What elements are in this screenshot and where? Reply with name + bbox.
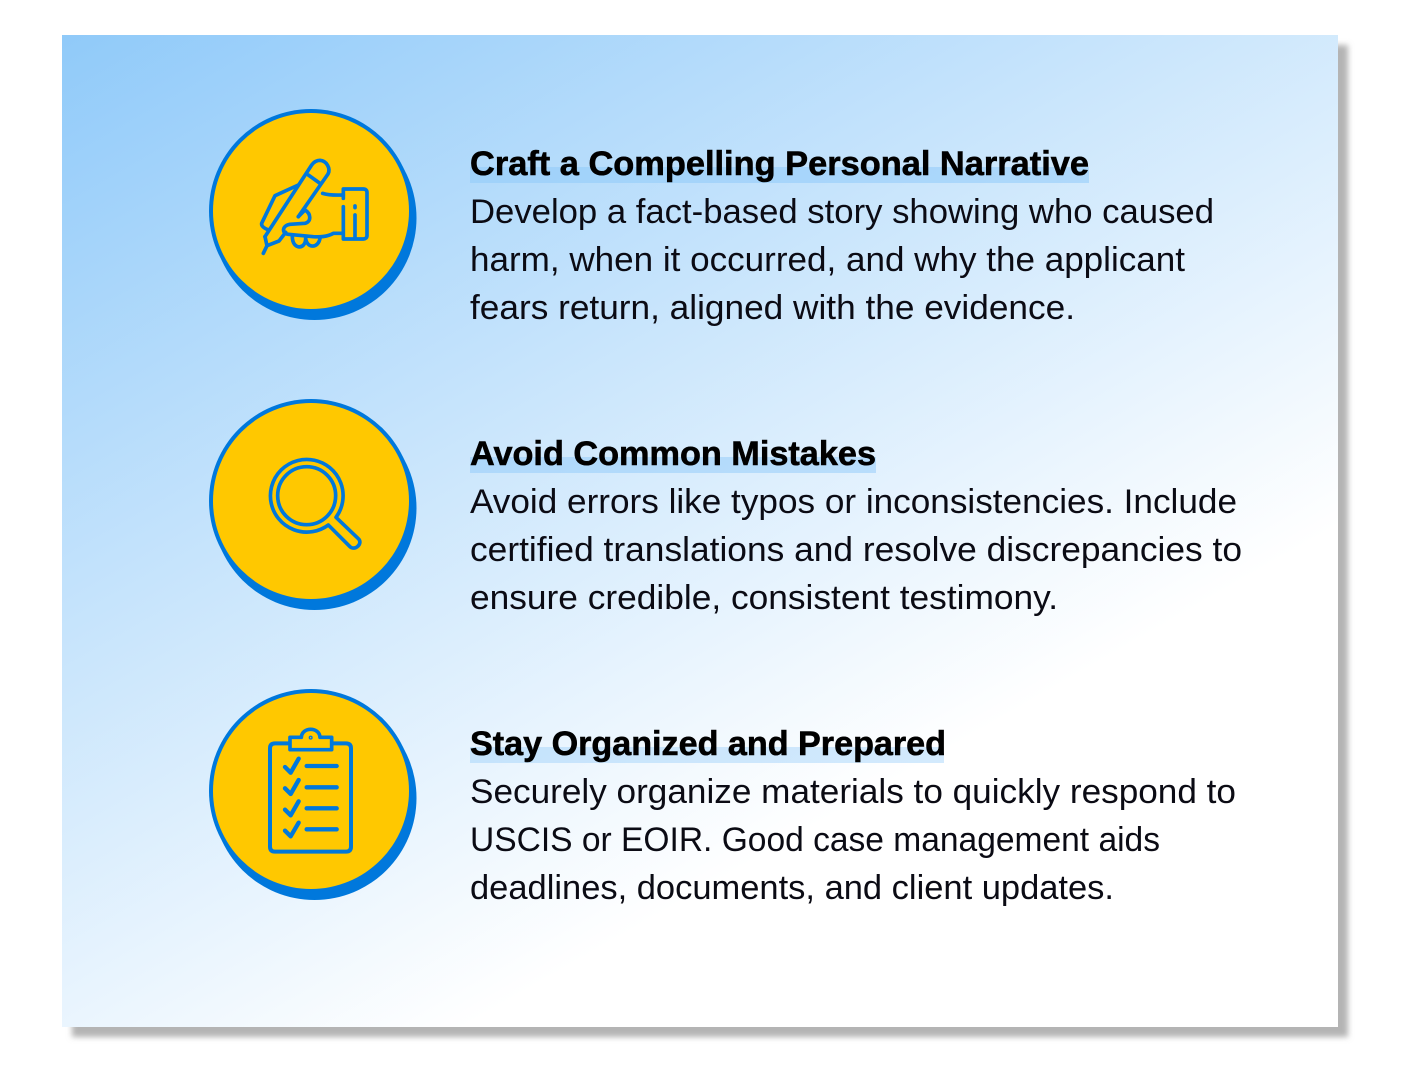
- heading: Avoid Common Mistakes: [470, 435, 876, 473]
- body text: ensure credible, consistent testimony.: [470, 579, 1058, 617]
- body text: [470, 483, 1242, 617]
- icon: pen in hand: [209, 109, 416, 320]
- body text: deadlines, documents, and client updates.: [470, 869, 1114, 907]
- body text: [470, 773, 1236, 907]
- heading highlight: [470, 747, 944, 763]
- body text: Securely organize materials to quickly respond to: [470, 773, 1236, 811]
- body text: [470, 193, 1214, 327]
- body text: Develop a fact-based story showing who caused: [470, 193, 1214, 231]
- body text: fears return, aligned with the evidence.: [470, 289, 1075, 327]
- item: stay organized: [209, 689, 1236, 907]
- body text: Avoid errors like typos or inconsistencies. Include: [470, 483, 1237, 521]
- heading highlight: [470, 167, 1089, 183]
- heading: Craft a Compelling Personal Narrative: [470, 145, 1089, 183]
- heading highlight: [470, 457, 876, 473]
- item: personal narrative: [209, 109, 1214, 327]
- item: common mistakes: [209, 399, 1242, 617]
- heading: Stay Organized and Prepared: [470, 725, 946, 763]
- icon: magnifying glass: [209, 399, 416, 610]
- body text: harm, when it occurred, and why the applicant: [470, 241, 1185, 279]
- body text: certified translations and resolve discrepancies to: [470, 531, 1242, 569]
- icon: clipboard checklist: [209, 689, 416, 900]
- body text: USCIS or EOIR. Good case management aids: [470, 821, 1160, 859]
